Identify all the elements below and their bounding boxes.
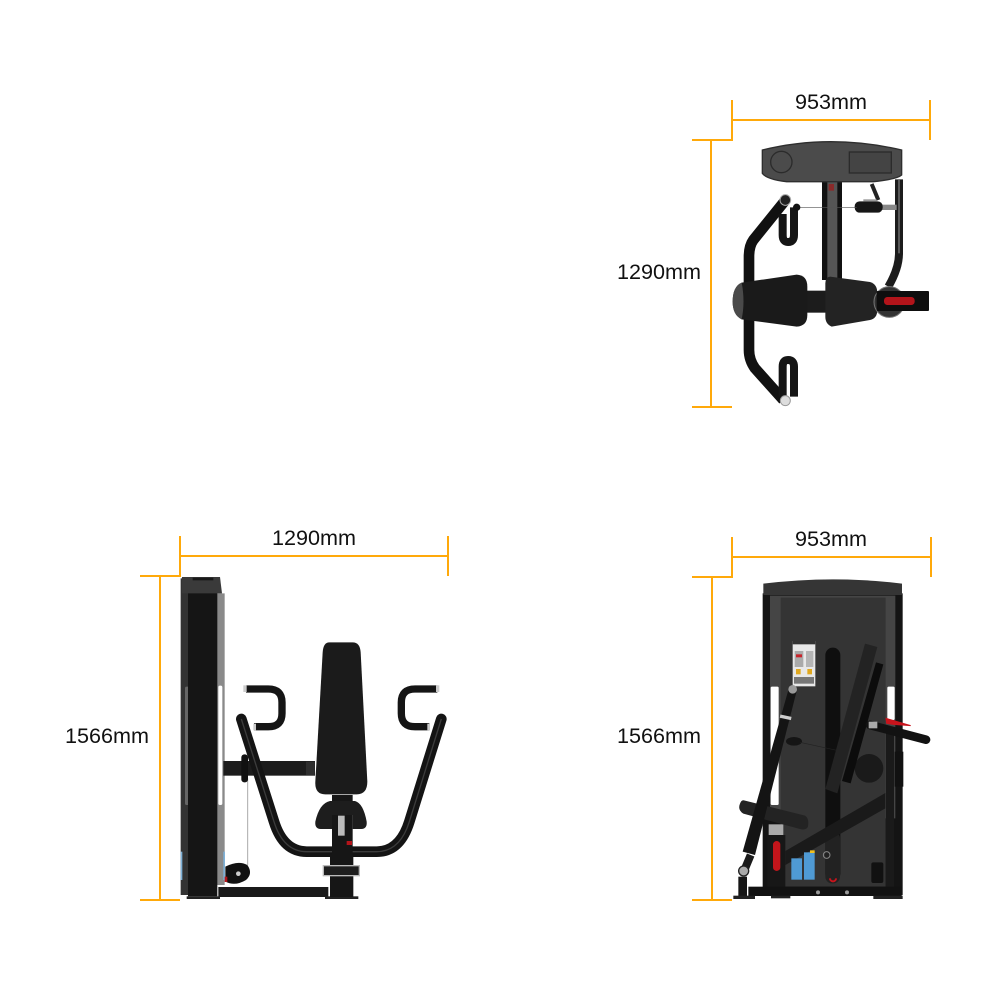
right arm tube (888, 179, 899, 287)
main column (188, 593, 217, 896)
diagonal brace (785, 793, 885, 865)
seat pad (739, 800, 808, 829)
grip tips (243, 685, 439, 730)
right grip (401, 689, 437, 727)
selector hub (874, 287, 929, 317)
left press arm (749, 201, 785, 400)
right grip lever (869, 718, 926, 740)
side view dimensions (65, 527, 448, 900)
central beam (822, 182, 842, 280)
label: front view width: 953mm (795, 528, 867, 551)
warning labels (791, 850, 815, 880)
column cap (182, 577, 222, 593)
weight slot (825, 648, 840, 881)
seat pad (315, 801, 367, 829)
label: front view height: 1566mm (617, 725, 701, 748)
front view machine (733, 579, 926, 899)
seat column (807, 291, 830, 313)
back pad bracket (842, 662, 883, 783)
lower grip (783, 360, 794, 397)
horizontal support beam (223, 761, 315, 776)
rear panel (763, 593, 903, 895)
right column (886, 732, 903, 888)
label: side view height: 1566mm (65, 725, 149, 748)
rear shroud (181, 578, 225, 895)
upper grip (783, 207, 794, 242)
top view dimensions (617, 91, 930, 407)
selector stack (823, 832, 840, 883)
pulley and cable (241, 754, 248, 865)
arm pivots (739, 685, 837, 876)
top cap (763, 579, 902, 595)
label: top view width: 953mm (795, 91, 867, 114)
label: top view depth: 1290mm (617, 261, 701, 284)
base post (323, 854, 359, 897)
base frame (733, 877, 903, 899)
weight plate (855, 754, 883, 783)
top view machine (733, 142, 929, 406)
front view dimensions (617, 528, 931, 900)
low pulley (225, 863, 250, 884)
yoke highlight (241, 719, 441, 852)
left press arm (743, 689, 797, 855)
weight stack shroud (762, 142, 902, 182)
low pulley bracket (871, 862, 883, 883)
shroud details (771, 151, 891, 173)
back pad (315, 642, 367, 794)
side view machine (181, 577, 441, 899)
press arm yoke (241, 719, 441, 852)
label: side view depth: 1290mm (272, 527, 356, 550)
back pad edge (733, 283, 743, 319)
seat column (767, 824, 785, 888)
back pad edge view (825, 644, 877, 793)
back pad (733, 275, 807, 327)
arm end caps (780, 195, 800, 406)
arm lower link (744, 855, 751, 871)
seat post (332, 795, 353, 858)
left grip (246, 689, 282, 727)
exercise placard (793, 641, 815, 686)
pulley (797, 184, 897, 213)
seat pad (825, 277, 877, 327)
base rail (187, 887, 358, 899)
